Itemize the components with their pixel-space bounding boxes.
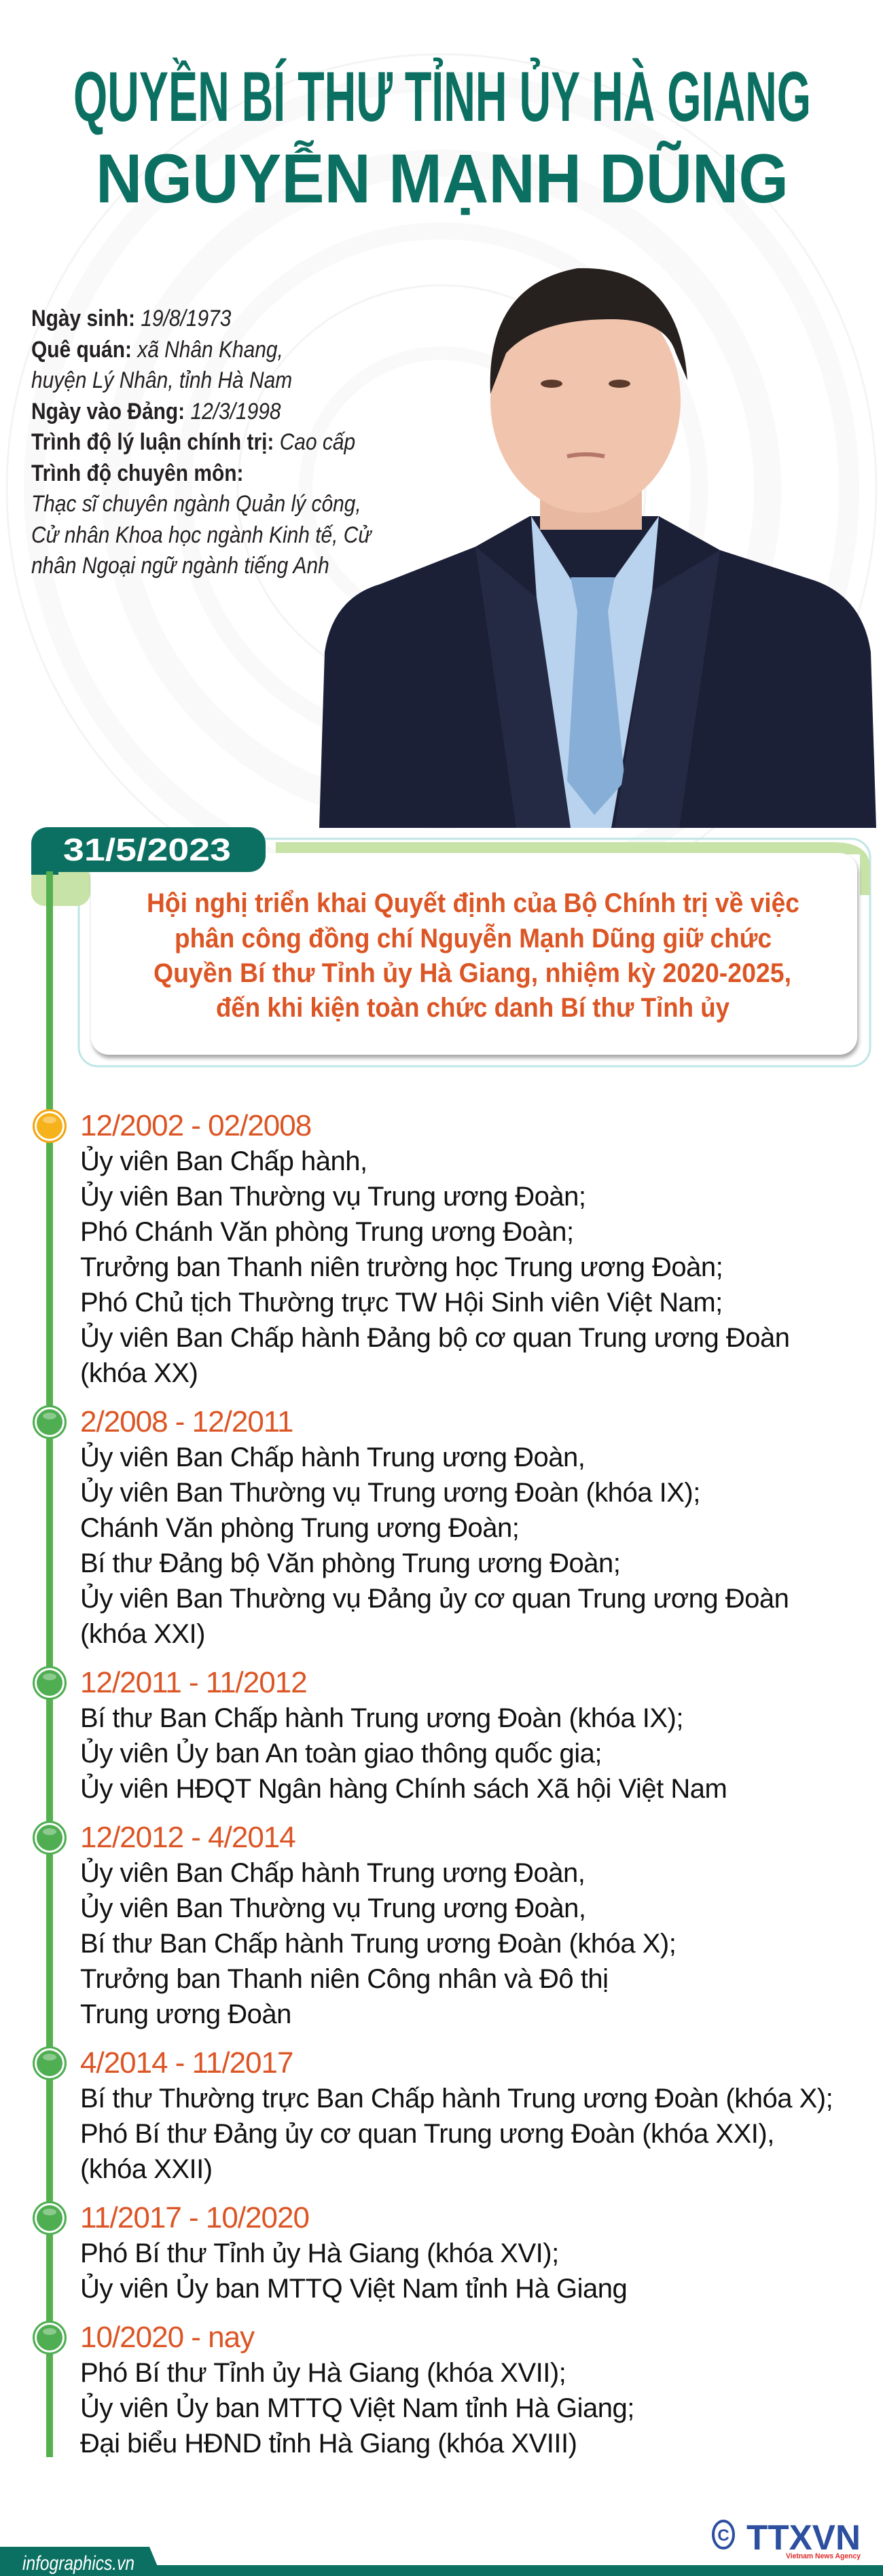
- logo: TTXVN: TTXVN: [746, 2518, 861, 2558]
- text block: personal info: Cử nhân Khoa học ngành Kinh tế, Cử: [31, 522, 371, 547]
- title: [73, 57, 811, 217]
- entry 10/2020 - nay: Ủy viên Ủy ban MTTQ Việt Nam tỉnh Hà Giang;: [80, 2393, 634, 2423]
- entry 4/2014 - 11/2017: 4/2014 - 11/2017: [80, 2046, 293, 2080]
- callout text: Quyền Bí thư Tỉnh ủy Hà Giang, nhiệm kỳ 2020-2025,: [154, 958, 791, 988]
- footer: infographics.vn: [22, 2552, 134, 2575]
- entry 12/2002 - 02/2008: Phó Chủ tịch Thường trực TW Hội Sinh viên Việt Nam;: [80, 1288, 723, 1318]
- entry 11/2017 - 10/2020: Phó Bí thư Tỉnh ủy Hà Giang (khóa XVI);: [80, 2238, 559, 2268]
- text block: personal info: [31, 306, 372, 579]
- entry 12/2002 - 02/2008: 12/2002 - 02/2008: [80, 1109, 311, 1142]
- entry 12/2002 - 02/2008: Ủy viên Ban Thường vụ Trung ương Đoàn;: [80, 1182, 585, 1212]
- entry 4/2014 - 11/2017: (khóa XXII): [80, 2154, 213, 2184]
- text block: personal info: nhân Ngoại ngữ ngành tiếng Anh: [31, 553, 329, 579]
- entry 12/2011 - 11/2012: Ủy viên Ủy ban An toàn giao thông quốc gia;: [80, 1739, 602, 1768]
- logo: TTXVN: Vietnam News Agency: [786, 2552, 861, 2560]
- portrait photo: [319, 268, 876, 828]
- entry 2/2008 - 12/2011: Ủy viên Ban Thường vụ Đảng ủy cơ quan Trung ương Đoàn: [80, 1584, 789, 1614]
- entry 12/2002 - 02/2008: Ủy viên Ban Chấp hành Đảng bộ cơ quan Trung ương Đoàn: [80, 1323, 790, 1353]
- entry 10/2020 - nay: Phó Bí thư Tỉnh ủy Hà Giang (khóa XVII);: [80, 2358, 566, 2388]
- text block: personal info: Ngày vào Đảng: 12/3/1998: [31, 398, 281, 424]
- callout text: phân công đồng chí Nguyễn Mạnh Dũng giữ chức: [175, 922, 772, 954]
- entry 12/2011 - 11/2012: Bí thư Ban Chấp hành Trung ương Đoàn (khóa IX);: [80, 1703, 683, 1733]
- entry 12/2012 - 4/2014: Bí thư Ban Chấp hành Trung ương Đoàn (khóa X);: [80, 1929, 676, 1959]
- entry 2/2008 - 12/2011: Chánh Văn phòng Trung ương Đoàn;: [80, 1513, 519, 1543]
- entry 12/2012 - 4/2014: Ủy viên Ban Chấp hành Trung ương Đoàn,: [80, 1858, 585, 1888]
- entry 12/2002 - 02/2008: Ủy viên Ban Chấp hành,: [80, 1146, 367, 1176]
- entry 2/2008 - 12/2011: Ủy viên Ban Chấp hành Trung ương Đoàn,: [80, 1443, 585, 1472]
- entry 12/2011 - 11/2012: Ủy viên HĐQT Ngân hàng Chính sách Xã hội Việt Nam: [80, 1774, 727, 1804]
- text block: personal info: Ngày sinh: 19/8/1973: [31, 306, 231, 331]
- callout text: đến khi kiện toàn chức danh Bí thư Tỉnh ủy: [216, 993, 730, 1023]
- text block: personal info: Quê quán: xã Nhân Khang,: [31, 337, 283, 363]
- entry 12/2002 - 02/2008: Phó Chánh Văn phòng Trung ương Đoàn;: [80, 1217, 574, 1247]
- entry 10/2020 - nay: [33, 2321, 634, 2459]
- entry 4/2014 - 11/2017: Phó Bí thư Đảng ủy cơ quan Trung ương Đoàn (khóa XXI),: [80, 2119, 774, 2149]
- entry 4/2014 - 11/2017: [33, 2046, 833, 2184]
- entry 12/2012 - 4/2014: Trưởng ban Thanh niên Công nhân và Đô thị: [80, 1964, 608, 1994]
- entry 11/2017 - 10/2020: Ủy viên Ủy ban MTTQ Việt Nam tỉnh Hà Giang: [80, 2274, 627, 2304]
- entry 12/2012 - 4/2014: Ủy viên Ban Thường vụ Trung ương Đoàn,: [80, 1893, 585, 1923]
- panel: 31/5/2023 event: [31, 827, 871, 1068]
- background drum pattern: [5, 53, 878, 842]
- footer: [0, 2547, 883, 2576]
- text block: personal info: Thạc sĩ chuyên ngành Quản lý công,: [31, 491, 361, 517]
- text block: personal info: Trình độ lý luận chính trị: Cao cấp: [31, 429, 355, 455]
- logo: TTXVN: C: [717, 2526, 729, 2545]
- entry 2/2008 - 12/2011: Bí thư Đảng bộ Văn phòng Trung ương Đoàn;: [80, 1548, 620, 1578]
- entry 12/2002 - 02/2008: Trưởng ban Thanh niên trường học Trung ương Đoàn;: [80, 1252, 723, 1282]
- entry 12/2002 - 02/2008: [33, 1109, 790, 1388]
- timeline line: [46, 871, 53, 2457]
- entry 11/2017 - 10/2020: [33, 2201, 627, 2304]
- entry 12/2002 - 02/2008: (khóa XX): [80, 1358, 198, 1388]
- entry 12/2011 - 11/2012: [33, 1666, 727, 1804]
- entry 10/2020 - nay: Đại biểu HĐND tỉnh Hà Giang (khóa XVIII): [80, 2429, 577, 2459]
- entry 12/2012 - 4/2014: [33, 1821, 676, 2029]
- callout text: Hội nghị triển khai Quyết định của Bộ Chính trị về việc: [147, 888, 799, 918]
- entry 2/2008 - 12/2011: Ủy viên Ban Thường vụ Trung ương Đoàn (khóa IX);: [80, 1478, 700, 1508]
- title: NGUYỄN MẠNH DŨNG: [96, 140, 789, 217]
- entry 2/2008 - 12/2011: 2/2008 - 12/2011: [80, 1405, 293, 1438]
- entry 10/2020 - nay: 10/2020 - nay: [80, 2321, 254, 2354]
- panel: 31/5/2023 event: 31/5/2023: [63, 832, 231, 867]
- entry 11/2017 - 10/2020: 11/2017 - 10/2020: [80, 2201, 309, 2234]
- callout text: [147, 888, 799, 1023]
- entry 4/2014 - 11/2017: Bí thư Thường trực Ban Chấp hành Trung ương Đoàn (khóa X);: [80, 2084, 833, 2114]
- entry 12/2012 - 4/2014: 12/2012 - 4/2014: [80, 1821, 295, 1854]
- entry 12/2011 - 11/2012: 12/2011 - 11/2012: [80, 1666, 307, 1699]
- entry 2/2008 - 12/2011: (khóa XXI): [80, 1619, 205, 1649]
- text block: personal info: huyện Lý Nhân, tỉnh Hà Nam: [31, 367, 292, 393]
- entry 12/2012 - 4/2014: Trung ương Đoàn: [80, 1999, 291, 2029]
- text block: personal info: Trình độ chuyên môn:: [31, 460, 243, 486]
- timeline entries: [33, 1109, 833, 2459]
- entry 2/2008 - 12/2011: [33, 1405, 789, 1649]
